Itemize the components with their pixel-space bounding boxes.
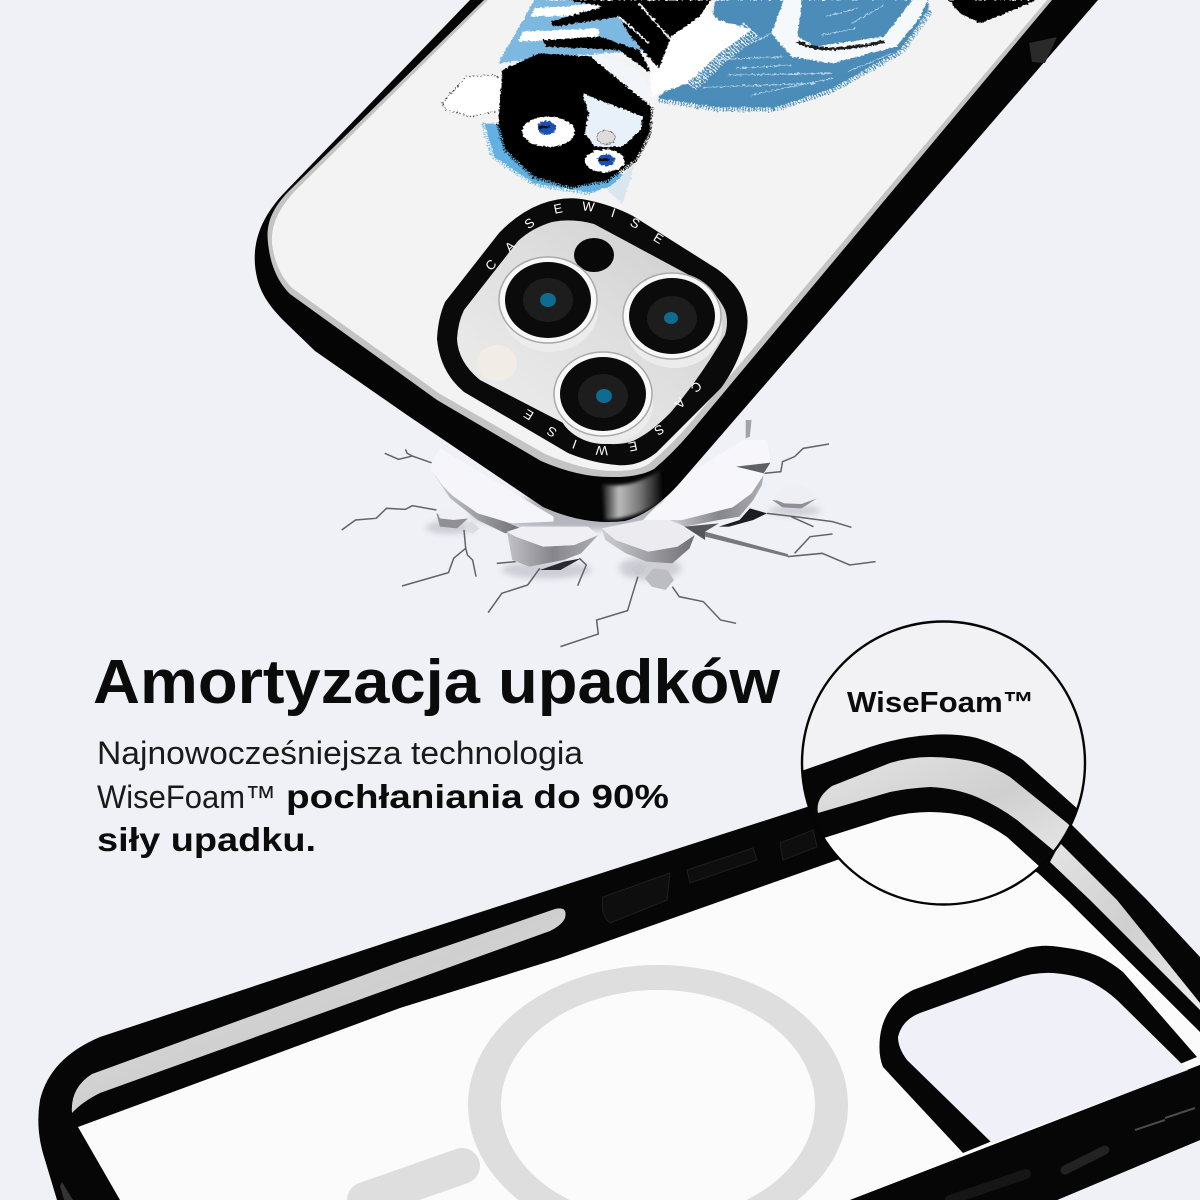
description text: pochłaniania do 90% bbox=[286, 778, 669, 815]
black head bbox=[498, 53, 651, 187]
magnifier label: WiseFoam™ bbox=[847, 687, 1034, 719]
muzzle bbox=[583, 93, 643, 147]
lens right bbox=[623, 273, 722, 368]
ring lettering top: C bbox=[482, 256, 499, 273]
black lower stripe bbox=[543, 37, 651, 73]
magnet pill bbox=[365, 1166, 462, 1200]
bumper highlight bbox=[602, 470, 662, 520]
right plate bbox=[643, 440, 770, 520]
halo fringe bbox=[484, 123, 591, 193]
cracked ground bbox=[342, 420, 876, 647]
ring lettering top bbox=[482, 198, 666, 273]
title: Amortyzacja upadków bbox=[93, 648, 781, 717]
camera plate bbox=[457, 220, 727, 444]
white curve bbox=[772, 0, 928, 63]
fur streaks bbox=[703, 5, 892, 95]
crack lines bbox=[342, 444, 876, 647]
white fur band bbox=[647, 0, 751, 97]
bottom case inside view bbox=[38, 776, 1200, 1200]
ring lettering top: W bbox=[582, 198, 596, 215]
magnifier background bbox=[802, 622, 1085, 904]
left eye bbox=[537, 121, 556, 134]
ring lettering top: E bbox=[651, 230, 666, 247]
upright shard bbox=[746, 420, 752, 438]
ring lettering bottom bbox=[521, 379, 705, 458]
stripe highlights bbox=[619, 3, 671, 43]
foam band right bbox=[1050, 843, 1200, 1010]
impact shadow bbox=[471, 497, 691, 530]
camera cutout opening bbox=[898, 973, 1188, 1143]
metal lip bbox=[268, 0, 1052, 477]
case bumper bbox=[255, 0, 1098, 522]
left eye patch bbox=[522, 116, 575, 147]
clear interior bbox=[78, 843, 1200, 1200]
right eye bbox=[598, 154, 614, 166]
light blue shoulder bbox=[498, 0, 655, 63]
nose bbox=[597, 130, 615, 144]
black under-edge bbox=[798, 42, 884, 49]
chunk centre left bbox=[507, 527, 598, 570]
ring lettering bottom: I bbox=[570, 437, 579, 452]
microphone hole bbox=[574, 238, 614, 272]
ring lettering bottom: C bbox=[688, 379, 705, 396]
right plate edge bbox=[676, 475, 764, 527]
head fringe bbox=[498, 107, 651, 187]
tiger artwork bbox=[442, 0, 1037, 204]
description text bbox=[97, 735, 669, 858]
blue head halo bbox=[484, 123, 631, 193]
side buttons bbox=[602, 830, 817, 923]
case frame bbox=[38, 776, 1200, 1200]
flash bbox=[477, 345, 517, 381]
dark hole bbox=[719, 508, 767, 527]
chunk shadows bbox=[426, 505, 820, 580]
head white side bbox=[591, 55, 653, 103]
fur fringe bbox=[659, 10, 928, 107]
ear bbox=[442, 75, 514, 117]
left port bbox=[60, 1182, 73, 1200]
small dark triangle bbox=[736, 463, 770, 473]
ring lettering bottom: S bbox=[651, 421, 667, 439]
top phone in case bbox=[255, 0, 1098, 522]
ring lettering bottom: S bbox=[544, 423, 559, 441]
small chunks left bbox=[436, 506, 479, 534]
back panel bbox=[272, 0, 1047, 471]
lower ear bbox=[607, 163, 635, 204]
bottom ports bbox=[950, 1108, 1195, 1200]
left plate edge bbox=[431, 470, 521, 533]
camera cutout frame bbox=[879, 946, 1197, 1153]
small chunks bottom bbox=[631, 563, 674, 590]
lens left bbox=[499, 257, 598, 352]
rock right bbox=[772, 485, 817, 508]
ring lettering bottom: E bbox=[627, 438, 639, 455]
blue body fur bbox=[659, 0, 928, 107]
fur top right bbox=[948, 0, 1037, 23]
left plate bbox=[431, 448, 554, 523]
chunk centre right bbox=[602, 520, 695, 563]
magnifier: WiseFoam detail bbox=[790, 622, 1090, 915]
enlarged case corner bbox=[803, 734, 1076, 903]
description text: Najnowocześniejsza technologia bbox=[97, 735, 583, 771]
ring lettering top: S bbox=[521, 215, 538, 232]
side button bbox=[1029, 37, 1057, 63]
white band fringe bbox=[687, 30, 751, 83]
black back stripes bbox=[551, 0, 711, 68]
camera ring bbox=[437, 198, 748, 465]
grey gap bbox=[684, 523, 719, 540]
ring lettering top: A bbox=[502, 238, 518, 255]
magnifier outline bbox=[802, 622, 1085, 904]
right eye patch bbox=[585, 149, 625, 172]
ring lettering bottom: A bbox=[672, 395, 689, 412]
ring lettering bottom: W bbox=[595, 443, 608, 458]
ring lettering top: S bbox=[628, 214, 643, 232]
ring lettering bottom: E bbox=[521, 406, 536, 423]
foam band left bbox=[72, 908, 566, 1113]
magnet ring bbox=[468, 965, 848, 1200]
ring lettering top: I bbox=[609, 205, 617, 220]
cover bottom edge bbox=[850, 1065, 1200, 1200]
lens bottom bbox=[554, 352, 653, 444]
ring lettering top: E bbox=[552, 200, 564, 217]
description text: siły upadku. bbox=[97, 821, 316, 858]
wedge crack bbox=[705, 532, 789, 557]
white shoulder stripes bbox=[518, 3, 599, 42]
description text: WiseFoam™ bbox=[97, 779, 276, 815]
